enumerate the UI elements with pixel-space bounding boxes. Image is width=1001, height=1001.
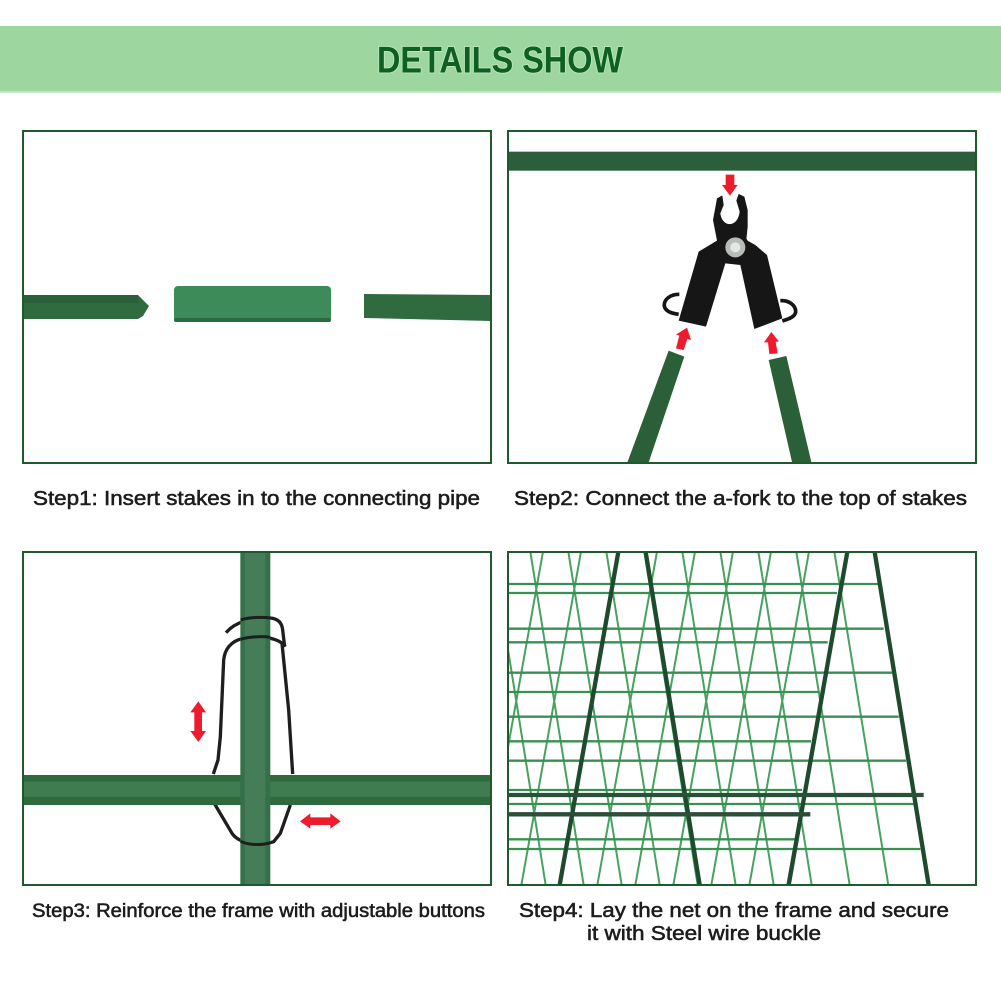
right red arrow up <box>764 332 779 354</box>
left red arrow up <box>676 328 691 350</box>
title: DETAILS SHOW <box>377 40 623 80</box>
left stake <box>627 351 684 463</box>
wire clip back <box>213 618 293 844</box>
frame poles <box>560 550 929 885</box>
horizontal pole <box>22 775 492 805</box>
red arrow down <box>722 175 738 196</box>
net diagonals <box>509 553 890 884</box>
panel: step 1 stakes and connecting pipe <box>23 131 491 463</box>
banner: details show <box>0 26 1001 93</box>
vertical pole <box>240 550 270 885</box>
connecting pipe <box>174 286 331 322</box>
red vertical double arrow <box>190 701 206 742</box>
caption: step 4: Step4: Lay the net on the frame and secure <box>519 900 949 922</box>
caption: step 1: Step1: Insert stakes in to the connecting pipe <box>33 488 480 510</box>
caption: step 3: Step3: Reinforce the frame with adjustable buttons <box>32 901 485 922</box>
fork bolt <box>725 237 745 257</box>
black a-fork connector <box>664 194 796 329</box>
left pointed stake <box>23 295 149 319</box>
right stake <box>769 356 812 463</box>
caption: step 2: Step2: Connect the a-fork to the top of stakes <box>514 488 967 510</box>
cross bars <box>507 795 924 814</box>
panel: step 3 adjustable button <box>22 550 492 885</box>
panel frame <box>508 552 976 885</box>
caption: step 4: it with Steel wire buckle <box>587 923 821 945</box>
red horizontal double arrow <box>300 813 341 829</box>
panel: step 4 net on frame <box>507 551 977 886</box>
panel: step 2 a-fork <box>507 131 977 463</box>
panel frame <box>23 552 491 885</box>
caption: step 4 <box>519 900 949 945</box>
wire clip front <box>241 617 270 845</box>
panel frame <box>23 131 491 463</box>
top cross bar <box>507 152 977 171</box>
net horizontals <box>507 584 920 849</box>
right stake <box>364 294 491 321</box>
panel frame <box>508 131 976 463</box>
